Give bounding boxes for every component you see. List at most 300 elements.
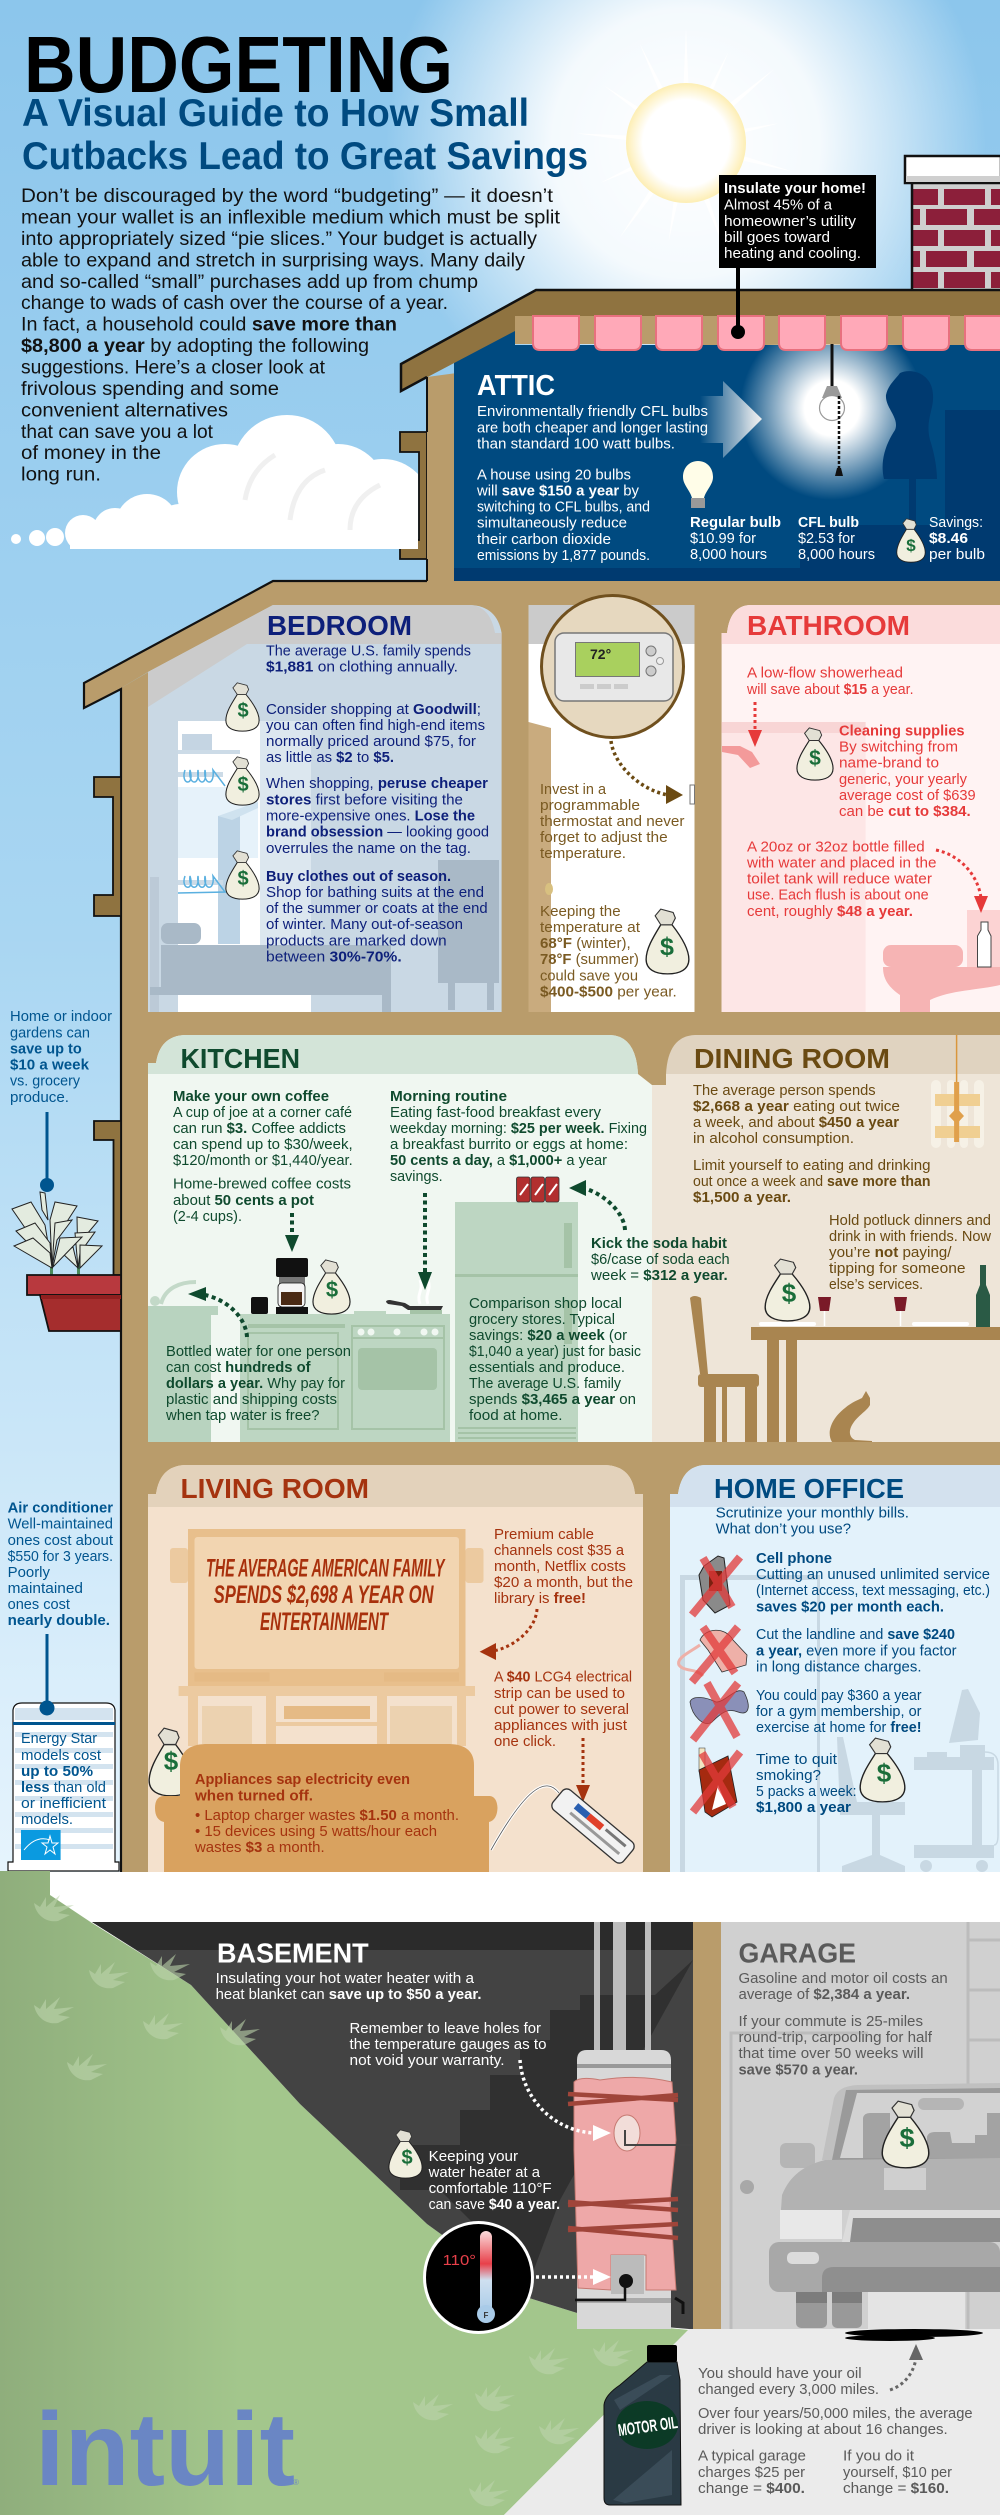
oil change text: A typical garage bbox=[698, 2449, 806, 2465]
cloud bbox=[11, 415, 418, 549]
dining text: you’re not paying/ bbox=[829, 1245, 953, 1261]
office text: smoking? bbox=[756, 1768, 821, 1784]
thermostat text: temperature. bbox=[540, 846, 626, 862]
garage text: If your commute is 25-miles bbox=[738, 2014, 923, 2030]
bedroom text: The average U.S. family spends bbox=[266, 644, 471, 660]
office text: Cutting an unused unlimited service bbox=[756, 1567, 990, 1583]
dining text: out once a week and save more than bbox=[693, 1174, 930, 1190]
garage door and shelves bbox=[731, 1922, 1000, 2329]
title bbox=[22, 20, 588, 178]
panel: bedroom bbox=[148, 605, 502, 1012]
attic text: $8.46 bbox=[929, 531, 968, 547]
attic text: per bulb bbox=[929, 547, 985, 563]
stairs silhouette bbox=[400, 1960, 693, 2280]
thermometer: 110° bbox=[443, 2252, 476, 2269]
kitchen text: $6/case of soda each bbox=[591, 1252, 730, 1268]
attic text bbox=[476, 370, 985, 564]
chandelier bbox=[931, 1035, 984, 1148]
attic text: than standard 100 watt bulbs. bbox=[477, 436, 675, 452]
air conditioner text: up to 50% bbox=[21, 1764, 93, 1780]
intro text: and so-called “small” purchases add up from chump bbox=[21, 271, 478, 293]
intro text bbox=[21, 185, 561, 486]
icon: coffee maker bbox=[251, 1258, 308, 1314]
air conditioner text bbox=[21, 1731, 106, 1828]
garage money bag: $ bbox=[899, 2123, 915, 2153]
intro text: mean your wallet is an inflexible medium which must be split bbox=[21, 206, 561, 228]
callout: insulate your home: Insulate your home! bbox=[724, 181, 866, 197]
arrows: living room bbox=[480, 1609, 590, 1802]
living room text: strip can be used to bbox=[494, 1686, 625, 1702]
bathroom text: cent, roughly $48 a year. bbox=[747, 904, 913, 920]
garage text: round-trip, carpooling for half bbox=[738, 2030, 933, 2046]
basement text: Keeping your bbox=[429, 2149, 518, 2165]
bedroom text: $1,881 on clothing annually. bbox=[266, 660, 458, 676]
showerhead bbox=[722, 746, 760, 768]
water bottle bbox=[978, 922, 991, 967]
kitchen text: The average U.S. family bbox=[469, 1376, 622, 1392]
living room text: library is free! bbox=[494, 1591, 586, 1607]
thermostat device: 72° bbox=[590, 646, 611, 662]
bathroom text: can be cut to $384. bbox=[839, 804, 971, 820]
callout: insulate your home: homeowner’s utility bbox=[724, 214, 857, 230]
kitchen text: Kick the soda habit bbox=[591, 1236, 727, 1252]
bedroom money bags: $ bbox=[237, 700, 249, 722]
thermostat text: could save you bbox=[540, 969, 638, 985]
attic text: switching to CFL bulbs, and bbox=[477, 500, 650, 516]
air conditioner text: or inefficient bbox=[21, 1796, 106, 1812]
kitchen arrowheads bbox=[188, 1180, 586, 1301]
living room text: • 15 devices using 5 watts/hour each bbox=[195, 1824, 437, 1840]
money plant in window box bbox=[12, 1112, 121, 1331]
fridge bbox=[455, 1202, 578, 1442]
water heater bbox=[568, 1922, 693, 2329]
oil change text: change = $400. bbox=[698, 2481, 805, 2497]
bathroom text: A 20oz or 32oz bottle filled bbox=[747, 840, 925, 856]
kitchen text bbox=[165, 1043, 730, 1424]
roof attic bbox=[401, 290, 1000, 581]
left note: air conditioner bbox=[8, 1501, 113, 1629]
callout: insulate your home bbox=[719, 175, 876, 339]
tv headline: ENTERTAINMENT bbox=[260, 1608, 390, 1636]
bathroom text: will save about $15 a year. bbox=[746, 682, 914, 698]
garage text: GARAGE bbox=[738, 1938, 856, 1968]
panel: basement bbox=[92, 1922, 693, 2332]
kitchen text: Make your own coffee bbox=[173, 1089, 329, 1105]
thermostat text: 68°F (winter), bbox=[540, 936, 631, 952]
arrow to lamp bbox=[700, 381, 762, 458]
office text: (Internet access, text messaging, etc.) bbox=[756, 1583, 990, 1599]
bathroom text: By switching from bbox=[839, 740, 958, 756]
air conditioner text: models. bbox=[21, 1812, 73, 1828]
attic text: their carbon dioxide bbox=[477, 532, 611, 548]
thermostat text: forget to adjust the bbox=[540, 830, 668, 846]
bedroom text: brand obsession — looking good bbox=[266, 825, 489, 841]
callout: insulate your home: bill goes toward bbox=[724, 230, 830, 246]
panel: dining room bbox=[652, 1035, 1000, 1442]
attic text: A house using 20 bulbs bbox=[477, 468, 631, 484]
mannequin bbox=[883, 371, 937, 525]
tv headline: THE AVERAGE AMERICAN FAMILY bbox=[206, 1555, 446, 1583]
kitchen money bag bbox=[313, 1260, 350, 1314]
arrow: showerhead bbox=[748, 702, 762, 747]
basement text: the temperature gauges as to bbox=[350, 2037, 546, 2053]
icon: energy star logo bbox=[21, 1830, 61, 1860]
left note: air conditioner: Air conditioner bbox=[8, 1501, 113, 1517]
arrow to switch bbox=[611, 741, 694, 804]
attic text: emissions by 1,877 pounds. bbox=[477, 548, 650, 564]
living room money bag: $ bbox=[164, 1746, 179, 1776]
kitchen text: Bottled water for one person bbox=[166, 1344, 351, 1360]
dining furniture bbox=[690, 1296, 1000, 1442]
bathroom text: Cleaning supplies bbox=[839, 724, 965, 740]
office text: Cut the landline and save $240 bbox=[756, 1627, 955, 1643]
kitchen text: grocery stores. Typical bbox=[469, 1312, 615, 1328]
bedroom text: as little as $2 to $5. bbox=[266, 750, 394, 766]
bedroom text: between 30%-70%. bbox=[266, 950, 402, 966]
dining text: a week, and about $450 a year bbox=[693, 1115, 899, 1131]
kitchen money bag: $ bbox=[326, 1277, 338, 1302]
panel: garage bbox=[693, 1922, 1000, 2329]
kitchen text: food at home. bbox=[469, 1408, 562, 1424]
left note: air conditioner: Well-maintained bbox=[8, 1517, 113, 1533]
kitchen text: can cost hundreds of bbox=[166, 1360, 311, 1376]
living room text: Premium cable bbox=[494, 1527, 594, 1543]
living room text: wastes $3 a month. bbox=[194, 1840, 325, 1856]
intro text: In fact, a household could save more than bbox=[21, 314, 397, 336]
living room text bbox=[180, 1473, 633, 1856]
living room text: one click. bbox=[494, 1734, 556, 1750]
bedroom text: of winter. Many out-of-season bbox=[266, 917, 463, 933]
intro text: Don’t be discouraged by the word “budgeting” — it doesn’t bbox=[21, 185, 554, 207]
motor oil bottle bbox=[604, 2345, 681, 2505]
living room text: A $40 LCG4 electrical bbox=[494, 1670, 632, 1686]
attic text: Environmentally friendly CFL bulbs bbox=[477, 404, 708, 420]
living room text: cut power to several bbox=[494, 1702, 629, 1718]
oil change text: If you do it bbox=[843, 2449, 914, 2465]
kitchen text: spends $3,465 a year on bbox=[469, 1392, 636, 1408]
tv and stand bbox=[170, 1529, 484, 1746]
bedroom money bags: $ bbox=[237, 868, 249, 890]
bedroom text: Buy clothes out of season. bbox=[266, 869, 451, 885]
panel: living room bbox=[148, 1465, 643, 1872]
bathroom text: with water and placed in the bbox=[746, 856, 936, 872]
office text: You could pay $360 a year bbox=[756, 1688, 922, 1704]
kitchen text: A cup of joe at a corner café bbox=[173, 1105, 352, 1121]
office money bag bbox=[860, 1738, 905, 1802]
panel: bathroom bbox=[722, 605, 1000, 1012]
living room text: LIVING ROOM bbox=[180, 1473, 369, 1504]
icon: attic money bag bbox=[897, 519, 925, 562]
basement text: Remember to leave holes for bbox=[350, 2021, 541, 2037]
bathroom text: toilet tank will reduce water bbox=[747, 872, 932, 888]
bedroom text: more-expensive ones. Lose the bbox=[266, 809, 475, 825]
logo: intuit: intuit bbox=[35, 2392, 295, 2508]
dining text: drink in with friends. Now bbox=[829, 1229, 992, 1245]
cat silhouette bbox=[830, 1391, 872, 1442]
garage text: average of $2,384 a year. bbox=[738, 1987, 910, 2003]
icon: small coin bbox=[545, 883, 553, 895]
kitchen text: Comparison shop local bbox=[469, 1296, 622, 1312]
attic text: 8,000 hours bbox=[798, 547, 875, 563]
intro text: convenient alternatives bbox=[21, 399, 228, 421]
left note: air conditioner: $550 for 3 years. bbox=[8, 1549, 113, 1565]
office text: Scrutinize your monthly bills. bbox=[716, 1506, 909, 1522]
left note: indoor gardens: $10 a week bbox=[10, 1058, 90, 1074]
basement text: comfortable 110°F bbox=[429, 2181, 552, 2197]
living room text: when turned off. bbox=[194, 1789, 313, 1805]
motor oil bottle: MOTOR OIL bbox=[617, 2413, 679, 2440]
hanging lamp bbox=[820, 344, 844, 476]
bedroom money bags: $ bbox=[237, 774, 249, 796]
air conditioner text: Energy Star bbox=[21, 1731, 97, 1747]
tv headline bbox=[206, 1555, 446, 1636]
icon: dumbbell crossed bbox=[690, 1683, 748, 1740]
kitchen text: $1,040 a year) just for basic bbox=[469, 1344, 641, 1360]
bedroom text: Consider shopping at Goodwill; bbox=[266, 702, 481, 718]
dining text: The average person spends bbox=[693, 1083, 876, 1099]
kitchen text: about 50 cents a pot bbox=[173, 1193, 314, 1209]
icon: attic money bag: $ bbox=[906, 536, 916, 555]
oil change text: changed every 3,000 miles. bbox=[698, 2382, 879, 2398]
office money bag: $ bbox=[877, 1758, 892, 1788]
bedroom text: stores first before visiting the bbox=[266, 793, 463, 809]
dining text: Limit yourself to eating and drinking bbox=[693, 1158, 930, 1174]
left note: air conditioner: maintained bbox=[8, 1581, 83, 1597]
garage text: Gasoline and motor oil costs an bbox=[738, 1971, 948, 1987]
dining text: $1,500 a year. bbox=[693, 1190, 791, 1206]
kitchen text: weekday morning: $25 per week. Fixing bbox=[389, 1121, 647, 1137]
kitchen text: dollars a year. Why pay for bbox=[166, 1376, 345, 1392]
bathroom money bag: $ bbox=[809, 747, 821, 770]
title: A Visual Guide to How Small bbox=[22, 92, 529, 135]
living room text: month, Netflix costs bbox=[494, 1559, 626, 1575]
thermostat text bbox=[540, 782, 685, 1001]
pink insulation bbox=[533, 316, 1000, 350]
dining text: tipping for someone bbox=[829, 1261, 966, 1277]
air conditioner unit bbox=[8, 1634, 119, 1871]
left note: indoor gardens: Home or indoor bbox=[10, 1009, 112, 1025]
kitchen text: when tap water is free? bbox=[165, 1408, 320, 1424]
basement text: can save $40 a year. bbox=[429, 2197, 560, 2213]
living room text: • Laptop charger wastes $1.50 a month. bbox=[195, 1808, 459, 1824]
bathroom text: generic, your yearly bbox=[839, 772, 968, 788]
intro text: into appropriately sized “pie slices.” Your budget is actually bbox=[21, 228, 537, 250]
bathroom text: use. Each flush is about one bbox=[747, 888, 929, 904]
air conditioner text: less than old bbox=[21, 1780, 106, 1796]
kitchen text: week = $312 a year. bbox=[590, 1268, 728, 1284]
bathroom text: average cost of $639 bbox=[839, 788, 976, 804]
icon: cell phone crossed bbox=[692, 1556, 740, 1615]
thermostat device bbox=[542, 596, 684, 738]
arrow: bottle bbox=[936, 850, 988, 913]
attic text: simultaneously reduce bbox=[477, 516, 627, 532]
kitchen text: Home-brewed coffee costs bbox=[173, 1177, 351, 1193]
intro text: frivolous spending and some bbox=[21, 378, 279, 400]
oil change text: yourself, $10 per bbox=[843, 2465, 952, 2481]
dining money bag: $ bbox=[782, 1278, 797, 1308]
bedroom text: BEDROOM bbox=[267, 610, 412, 641]
attic panel bbox=[454, 316, 1000, 582]
bedroom text bbox=[266, 610, 489, 966]
left note: air conditioner: ones cost bbox=[8, 1597, 70, 1613]
bedroom text: normally priced around $75, for bbox=[266, 734, 476, 750]
basement text: heat blanket can save up to $50 a year. bbox=[216, 1987, 481, 2003]
second floor roof bbox=[84, 581, 1000, 1872]
air conditioner text: models cost bbox=[21, 1748, 101, 1764]
oil change text bbox=[698, 2366, 973, 2497]
bedroom text: overrules the name on the tag. bbox=[266, 841, 471, 857]
attic text: $2.53 for bbox=[798, 531, 855, 547]
dining text bbox=[693, 1043, 992, 1293]
kitchen arrows bbox=[205, 1188, 625, 1337]
dining text: $2,668 a year eating out twice bbox=[693, 1099, 900, 1115]
kitchen text: plastic and shipping costs bbox=[166, 1392, 337, 1408]
kitchen text: Morning routine bbox=[390, 1089, 507, 1105]
attic glow bbox=[740, 316, 924, 500]
hill bbox=[0, 1871, 689, 2515]
panel: kitchen bbox=[148, 1035, 730, 1442]
office text: a year, even more if you factor bbox=[756, 1644, 957, 1660]
bathroom money bag bbox=[797, 728, 833, 780]
kitchen text: Eating fast-food breakfast every bbox=[390, 1105, 602, 1121]
living room text: Appliances sap electricity even bbox=[195, 1772, 410, 1788]
intro text: able to expand and stretch in surprising ways. Many daily bbox=[21, 249, 525, 271]
background sky bbox=[0, 0, 1000, 1872]
bedroom text: When shopping, peruse cheaper bbox=[266, 776, 488, 792]
title: BUDGETING bbox=[24, 20, 453, 109]
car bbox=[769, 2083, 1000, 2329]
left note: indoor gardens: produce. bbox=[10, 1090, 69, 1106]
oil change text: Over four years/50,000 miles, the average bbox=[698, 2406, 973, 2422]
thermostat money bag: $ bbox=[660, 933, 674, 961]
thermometer: F bbox=[484, 2311, 489, 2320]
attic text: $10.99 for bbox=[690, 531, 756, 547]
chimney bbox=[905, 156, 1000, 290]
icon: cigarettes crossed bbox=[693, 1748, 740, 1817]
icon: power strip bbox=[491, 1786, 637, 1866]
kitchen text: can spend up to $30/week, bbox=[173, 1137, 353, 1153]
office text: exercise at home for free! bbox=[756, 1720, 922, 1736]
oil change text: charges $25 per bbox=[698, 2465, 805, 2481]
attic text: Savings: bbox=[929, 515, 983, 531]
thermostat text: Keeping the bbox=[540, 904, 621, 920]
garage money bag bbox=[882, 2101, 929, 2168]
office text: What don’t you use? bbox=[716, 1522, 851, 1538]
attic text: CFL bulb bbox=[798, 515, 859, 531]
bedroom text: you can often find high-end items bbox=[266, 718, 485, 734]
living room money bag bbox=[149, 1728, 193, 1796]
basement text: BASEMENT bbox=[217, 1938, 369, 1968]
thermostat text: Invest in a bbox=[540, 782, 607, 798]
left note: air conditioner: nearly double. bbox=[8, 1613, 110, 1629]
office text bbox=[714, 1473, 990, 1816]
intro text: change to wads of cash over the course of a year. bbox=[21, 292, 448, 314]
kitchen text: 50 cents a day, a $1,000+ a year bbox=[390, 1153, 607, 1169]
office text: for a gym membership, or bbox=[756, 1704, 922, 1720]
icon: landline crossed bbox=[679, 1627, 747, 1682]
bedroom money bags bbox=[226, 683, 259, 899]
bed silhouette bbox=[150, 860, 499, 1012]
office text: Time to quit bbox=[756, 1752, 837, 1768]
garage text: that time over 50 weeks will bbox=[738, 2046, 924, 2062]
icon: soda cans bbox=[516, 1177, 559, 1202]
attic text: ATTIC bbox=[477, 370, 555, 402]
bedroom text: Shop for bathing suits at the end bbox=[266, 885, 484, 901]
thermostat text: temperature at bbox=[540, 920, 640, 936]
basement text: not void your warranty. bbox=[350, 2053, 504, 2069]
toilet bbox=[883, 910, 1000, 1012]
wine glasses and plates bbox=[759, 1265, 990, 1327]
bathroom text: name-brand to bbox=[839, 756, 939, 772]
thermostat text: 78°F (summer) bbox=[540, 952, 639, 968]
panel: thermostat bbox=[528, 596, 694, 1012]
hangers bbox=[178, 770, 225, 893]
basement text: Insulating your hot water heater with a bbox=[216, 1971, 475, 1987]
basement arrows bbox=[520, 2060, 611, 2285]
left note: indoor gardens: save up to bbox=[10, 1042, 82, 1058]
sofa bbox=[155, 1744, 498, 1872]
bathroom text bbox=[746, 610, 976, 920]
intro text: of money in the bbox=[21, 442, 161, 464]
thermometer bbox=[424, 2222, 532, 2332]
attic wall bracket bbox=[400, 432, 427, 559]
basement text: water heater at a bbox=[428, 2165, 541, 2181]
logo: intuit: ® bbox=[293, 2478, 299, 2487]
callout: insulate your home: heating and cooling. bbox=[724, 246, 861, 262]
kitchen text: (2-4 cups). bbox=[173, 1209, 242, 1225]
intro text: $8,800 a year by adopting the following bbox=[21, 335, 369, 357]
basement money bag bbox=[389, 2130, 422, 2178]
basement money bag: $ bbox=[401, 2147, 413, 2169]
tv headline: SPENDS $2,698 A YEAR ON bbox=[214, 1581, 434, 1609]
kitchen text: savings: $20 a week (or bbox=[469, 1328, 627, 1344]
attic text: 8,000 hours bbox=[690, 547, 767, 563]
living room text: channels cost $35 a bbox=[494, 1543, 625, 1559]
left note: air conditioner: Poorly bbox=[8, 1565, 51, 1581]
attic text: Regular bulb bbox=[690, 515, 781, 531]
kitchen text: can run $3. Coffee addicts bbox=[173, 1121, 346, 1137]
office text: $1,800 a year bbox=[756, 1800, 851, 1816]
office text: Cell phone bbox=[756, 1551, 832, 1567]
left note: indoor gardens: vs. grocery bbox=[10, 1074, 81, 1090]
icon: regular bulb bbox=[683, 461, 713, 508]
bathroom text: BATHROOM bbox=[747, 610, 910, 641]
sun bbox=[386, 0, 986, 443]
kitchen text: KITCHEN bbox=[180, 1043, 300, 1074]
kitchen cabinets bbox=[148, 1202, 578, 1442]
dining money bag bbox=[765, 1259, 810, 1321]
intro text: suggestions. Here’s a closer look at bbox=[21, 356, 326, 378]
thermostat text: $400-$500 per year. bbox=[540, 985, 677, 1001]
kitchen text: savings. bbox=[390, 1169, 443, 1185]
oil spot and arrow bbox=[845, 2329, 983, 2390]
panel: home office bbox=[670, 1465, 1000, 1872]
office text: 5 packs a week: bbox=[756, 1784, 856, 1800]
thermostat text: thermostat and never bbox=[540, 814, 685, 830]
bedroom text: products are marked down bbox=[266, 934, 447, 950]
office silhouettes bbox=[680, 1575, 998, 1872]
attic text: will save $150 a year by bbox=[476, 484, 640, 500]
kitchen text: $120/month or $1,440/year. bbox=[173, 1153, 353, 1169]
office text: saves $20 per month each. bbox=[756, 1600, 944, 1616]
dining text: Hold potluck dinners and bbox=[829, 1213, 991, 1229]
bathroom text: A low-flow showerhead bbox=[747, 666, 903, 682]
left note: indoor gardens bbox=[10, 1009, 112, 1106]
dining text: in alcohol consumption. bbox=[693, 1131, 854, 1147]
left note: indoor gardens: gardens can bbox=[10, 1026, 90, 1042]
icon: frying pan bbox=[386, 1280, 443, 1314]
garage text: save $570 a year. bbox=[738, 2062, 858, 2078]
